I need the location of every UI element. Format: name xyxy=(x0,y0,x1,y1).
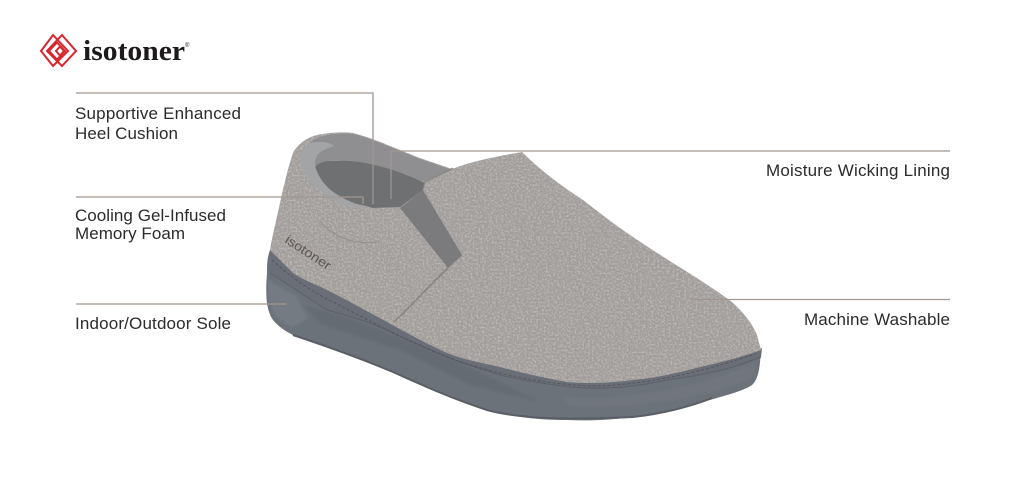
fleece texture xyxy=(260,125,770,390)
label: memory foam: Cooling Gel-Infused xyxy=(75,206,226,225)
collar rim xyxy=(300,142,362,208)
vamp edge shadow xyxy=(423,168,462,268)
infographic xyxy=(40,34,950,420)
outsole sculpted panel xyxy=(303,305,540,402)
leader: heel cushion xyxy=(76,93,373,204)
leader: memory foam xyxy=(76,197,363,204)
label: sole: Indoor/Outdoor Sole xyxy=(75,314,231,333)
label: heel cushion: Heel Cushion xyxy=(75,124,178,143)
welt stitching xyxy=(272,260,755,386)
leader: sole xyxy=(76,303,286,305)
lining interior xyxy=(315,161,425,208)
wordmark: isotoner xyxy=(83,35,185,67)
outsole bottom tread line xyxy=(293,335,712,419)
heel curved seam xyxy=(320,222,380,243)
heel and vamp fleece upper xyxy=(270,132,761,383)
icon: red nested diamonds xyxy=(41,35,76,66)
label: machine washable: Machine Washable xyxy=(804,310,950,329)
leader: machine washable xyxy=(690,298,950,300)
label: moisture wicking: Moisture Wicking Lining xyxy=(766,161,950,180)
leader lines xyxy=(76,93,950,304)
registered mark: ® xyxy=(185,42,190,49)
vamp seam xyxy=(394,268,448,322)
lining back wall xyxy=(303,133,452,182)
leader: moisture wicking xyxy=(391,151,950,199)
slipper xyxy=(260,125,770,420)
welt groove xyxy=(270,273,761,388)
logo xyxy=(41,35,190,67)
toe sole panel xyxy=(560,362,755,406)
foxing welt xyxy=(270,250,762,388)
outsole side highlight xyxy=(268,280,308,328)
label: memory foam: Memory Foam xyxy=(75,224,185,243)
heel embroidered logo: isotoner xyxy=(282,232,335,273)
label: heel cushion: Supportive Enhanced xyxy=(75,104,241,123)
elastic gore xyxy=(400,190,462,268)
outsole xyxy=(266,250,761,420)
